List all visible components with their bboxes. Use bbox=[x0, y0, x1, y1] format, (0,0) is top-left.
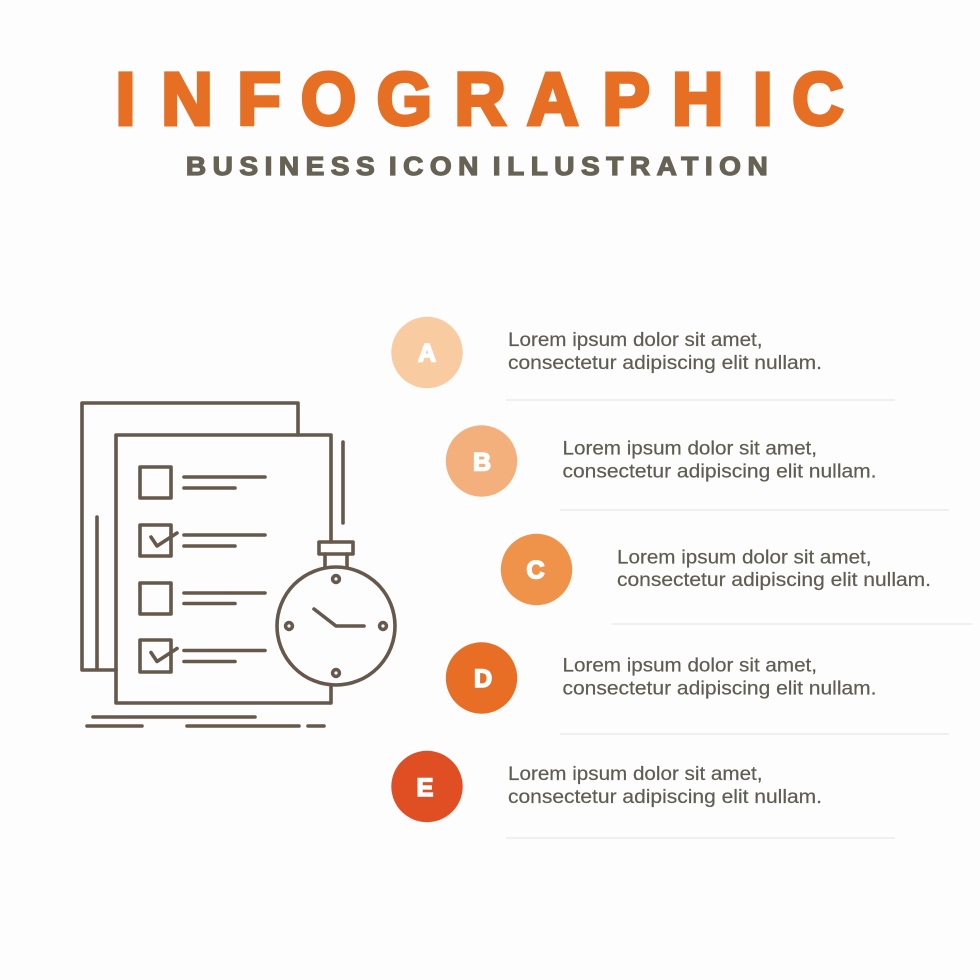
step E bbox=[391, 751, 895, 838]
title: INFOGRAPHIC bbox=[116, 58, 844, 141]
step A: consectetur adipiscing elit nullam. bbox=[508, 353, 822, 374]
step E: Lorem ipsum dolor sit amet, bbox=[508, 764, 762, 785]
subtitle: BUSINESS bbox=[186, 152, 381, 181]
checkbox row 4 checked bbox=[140, 640, 265, 672]
step B: consectetur adipiscing elit nullam. bbox=[562, 462, 876, 482]
step C: C bbox=[526, 556, 545, 584]
step E: E bbox=[417, 774, 433, 802]
step B bbox=[446, 425, 949, 510]
checkbox row 1 bbox=[140, 467, 265, 498]
step B: B bbox=[473, 448, 491, 476]
step A: Lorem ipsum dolor sit amet, bbox=[508, 330, 762, 351]
back sheet bbox=[82, 403, 298, 670]
step D: D bbox=[474, 665, 492, 693]
step D: Lorem ipsum dolor sit amet, bbox=[562, 656, 817, 677]
step B: Lorem ipsum dolor sit amet, bbox=[562, 439, 817, 460]
subtitle: ICON bbox=[389, 152, 485, 181]
step C bbox=[501, 534, 972, 624]
checkbox row 2 checked bbox=[140, 525, 265, 556]
step A bbox=[391, 317, 895, 400]
stopwatch bbox=[277, 442, 395, 685]
step D bbox=[446, 642, 949, 734]
step C: Lorem ipsum dolor sit amet, bbox=[617, 547, 872, 568]
ground lines bbox=[87, 717, 324, 726]
step E: consectetur adipiscing elit nullam. bbox=[508, 787, 822, 808]
step A: A bbox=[418, 340, 436, 368]
step C: consectetur adipiscing elit nullam. bbox=[617, 570, 931, 591]
icon: checklist with stopwatch bbox=[82, 403, 395, 726]
subtitle: ILLUSTRATION bbox=[493, 152, 774, 181]
front sheet bbox=[116, 435, 331, 703]
step D: consectetur adipiscing elit nullam. bbox=[562, 678, 876, 700]
checkbox row 3 bbox=[140, 583, 265, 614]
